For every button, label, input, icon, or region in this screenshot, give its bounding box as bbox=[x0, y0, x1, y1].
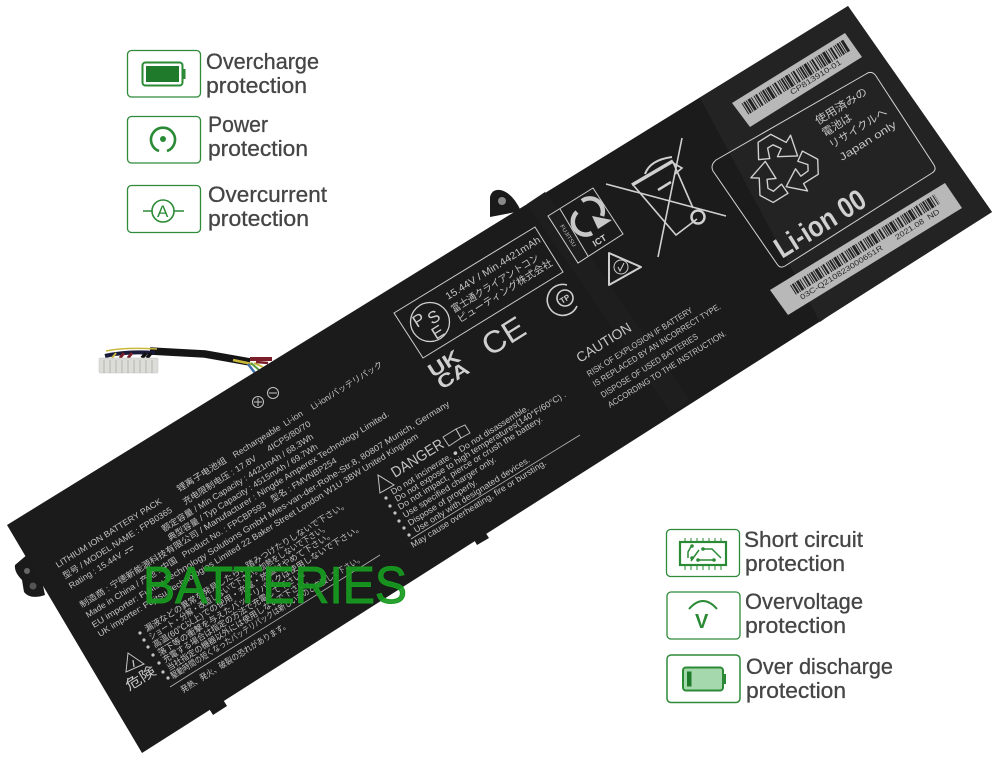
battery mounting tabs bbox=[15, 190, 521, 715]
recycling panel: リサイクルへ bbox=[827, 106, 890, 152]
PSE label box: S bbox=[424, 306, 444, 328]
feature: overcharge protection: Overcharge bbox=[206, 49, 319, 74]
label text block: battery specifications: Made in China / 产地 : 中国 Product No. : FPCBP593 型名 : FMVNBP254 bbox=[84, 455, 339, 620]
Japanese warning block: 落下等の衝撃を与えたバッテリパックは使用しないで下さい。 bbox=[156, 522, 365, 658]
manual book icon bbox=[443, 425, 470, 446]
CAUTION block: CAUTION bbox=[573, 319, 634, 366]
Japanese warning block: ショート・分解・改造しないで下さい。加熱をしないで下さい。 bbox=[147, 522, 330, 642]
CAUTION block: RISK OF EXPLOSION IF BATTERY bbox=[585, 305, 695, 379]
feature: overvoltage protection: protection bbox=[745, 613, 846, 638]
PSE label box: ピューティング株式会社 bbox=[455, 256, 555, 326]
CAUTION block: IS REPLACED BY AN INCORRECT TYPE. bbox=[591, 301, 722, 389]
icon: ammeter: A bbox=[157, 202, 169, 221]
barcode label: CP813910-01 bbox=[732, 33, 862, 127]
icon: recycling arrows bbox=[729, 118, 836, 223]
recycling panel: Japan only bbox=[837, 118, 900, 164]
barcode label: serial number: 03C-Q210823000651R bbox=[798, 243, 885, 302]
crossed-out wheelie bin icon bbox=[606, 138, 726, 257]
DANGER warning block: Do not expose to high temperatures(140°F/60°C) . bbox=[393, 389, 568, 504]
feature: short circuit protection bbox=[666, 527, 863, 576]
DANGER warning block: Use only with designated devices. bbox=[412, 455, 532, 535]
UKCA mark: CA bbox=[434, 358, 474, 394]
label text block: battery specifications: 额定容量 / Min Capacity : 4421mAh / 68.3Wh bbox=[160, 431, 315, 534]
icon: low battery bbox=[683, 668, 726, 690]
warning triangle icon bbox=[126, 653, 144, 672]
feature: overcharge protection bbox=[128, 49, 319, 98]
Japanese warning block: 駆動時間の短くなったバッテリパックは新しいものと交換して下さい。 bbox=[169, 553, 365, 681]
Japanese warning block: 当社指定の機器以外には使用しないで下さい。 bbox=[165, 574, 314, 673]
DANGER warning block: Do not incinerate. ● Do not disassemble. bbox=[389, 403, 531, 497]
PSE label box: P bbox=[409, 309, 429, 331]
feature: short circuit protection: protection bbox=[745, 551, 845, 576]
label text block: battery specifications: 制造商 : 宁德新能源科技有限公司 / Manufacturer : Ningde Amperex Technology Limited. bbox=[78, 409, 391, 610]
feature: over discharge protection bbox=[667, 654, 893, 703]
ICT label box: ICT bbox=[591, 232, 609, 249]
icon: full battery bbox=[142, 62, 186, 86]
feature: power protection bbox=[128, 112, 308, 163]
label text block: battery specifications: 型号 / MODEL NAME : FPB0365 bbox=[61, 505, 174, 581]
feature: over discharge protection: protection bbox=[746, 678, 846, 703]
label text block: battery specifications: 锂离子电池组 bbox=[175, 455, 229, 494]
icon: power ring bbox=[151, 128, 175, 151]
PSE label box: 富士通クライアントコン bbox=[449, 251, 541, 316]
icon: voltmeter: V bbox=[695, 611, 709, 633]
Japanese warning block bbox=[122, 499, 380, 695]
CAUTION block bbox=[573, 301, 728, 410]
barcode label: CP813910-01: CP813910-01 bbox=[788, 58, 843, 97]
barcode label: serial number: 2021.08 ND bbox=[893, 207, 942, 242]
label text block: battery specifications bbox=[54, 359, 452, 639]
feature: overcurrent protection: Overcurrent bbox=[208, 182, 327, 207]
feature: overvoltage protection bbox=[667, 589, 863, 639]
label text block: battery specifications: UK importer: Fujitsu Technologies Limited 22 Baker Street London W1U 3BW United Kingdom bbox=[96, 431, 420, 639]
DANGER warning block bbox=[378, 389, 580, 550]
feature: overvoltage protection: Overvoltage bbox=[745, 589, 863, 614]
icon: voltmeter bbox=[689, 601, 717, 633]
label text block: battery specifications: LITHIUM ION BATTERY PACK bbox=[54, 496, 164, 570]
polarity symbols bbox=[252, 388, 278, 408]
feature: overcharge protection: protection bbox=[206, 73, 307, 98]
DANGER warning block: May cause overheating, fire or bursting. bbox=[409, 457, 548, 550]
Japanese warning block: 漏液などの異常を発見したら、踏みつけたりしないで下さい。 bbox=[143, 499, 350, 634]
PSE label box: 15.44V / Min.4421mAh bbox=[444, 235, 543, 303]
CAUTION block: DISPOSE OF USED BATTERIES bbox=[599, 331, 700, 400]
label text block: battery specifications: 典型容量 / Typ Capacity : 4515mAh / 69.7Wh bbox=[166, 441, 320, 543]
DANGER warning block: Do not impact, pierce or crush the battery. bbox=[396, 414, 544, 512]
UKCA mark: UK bbox=[425, 346, 465, 382]
recycling panel: Li-ion 00 bbox=[769, 184, 872, 265]
feature: power protection: protection bbox=[208, 136, 308, 161]
connector cable bbox=[99, 348, 272, 373]
CE mark: CE bbox=[475, 309, 532, 363]
barcode label: serial number bbox=[770, 183, 962, 315]
UKCA mark bbox=[425, 346, 474, 394]
recycling panel bbox=[712, 72, 935, 267]
label text block: battery specifications: Rechargeable Li-ion bbox=[231, 408, 305, 460]
icon: ammeter bbox=[143, 200, 184, 222]
CAUTION block: ACCORDING TO THE INSTRUCTION. bbox=[606, 328, 728, 410]
recycling panel: 使用済みの bbox=[813, 85, 870, 128]
ICT label box: FUJITSU bbox=[558, 224, 577, 248]
Japanese warning block: 危険 bbox=[122, 662, 159, 694]
icon: circuit board bbox=[680, 538, 726, 570]
feature: short circuit protection: Short circuit bbox=[744, 527, 863, 552]
feature: overcurrent protection: protection bbox=[208, 206, 309, 231]
watermark: BATTERIES: BATTERIES bbox=[143, 557, 407, 615]
label text block: battery specifications: 充电限制电压 : 17.8V bbox=[181, 453, 258, 507]
DANGER warning block: Dispose of properly. bbox=[406, 477, 479, 528]
TP certification mark: TP bbox=[558, 292, 572, 306]
label text block: battery specifications: Rating : 15.44V bbox=[67, 550, 124, 591]
feature: over discharge protection: Over discharge bbox=[746, 654, 893, 679]
feature: overcurrent protection bbox=[128, 182, 327, 232]
recycling panel: 電池は bbox=[820, 111, 855, 140]
danger triangle icon bbox=[378, 475, 394, 493]
connector plug bbox=[99, 358, 158, 373]
Japanese warning block: 高温(60℃以上)での使用・充電・放置はやめて下さい。 bbox=[151, 529, 336, 650]
label text block: battery specifications: Li-ion/バッテリパック bbox=[309, 359, 384, 412]
PSE label box: E bbox=[428, 321, 448, 343]
Japanese warning block: 発熱、発火、破裂の恐れがあります。 bbox=[179, 619, 291, 695]
ICT label box bbox=[548, 188, 623, 263]
TP certification mark bbox=[547, 284, 577, 315]
DANGER warning block: Use specified charger only. bbox=[401, 454, 498, 520]
DANGER warning block: DANGER bbox=[388, 436, 447, 481]
label text block: battery specifications: EU importer: Fujitsu Technology Solutions GmbH Mies-van-der-Rohe-Str.8, 80807 Munich, Germany bbox=[90, 398, 452, 630]
PSE label box bbox=[394, 227, 563, 358]
feature: power protection: Power bbox=[208, 112, 268, 137]
label text block: battery specifications: 4ICP5/80/70 bbox=[265, 419, 313, 454]
triangle compliance mark bbox=[609, 253, 641, 285]
Japanese warning block: 充電する場合は指定の方法で充電して下さい。 bbox=[161, 566, 310, 665]
